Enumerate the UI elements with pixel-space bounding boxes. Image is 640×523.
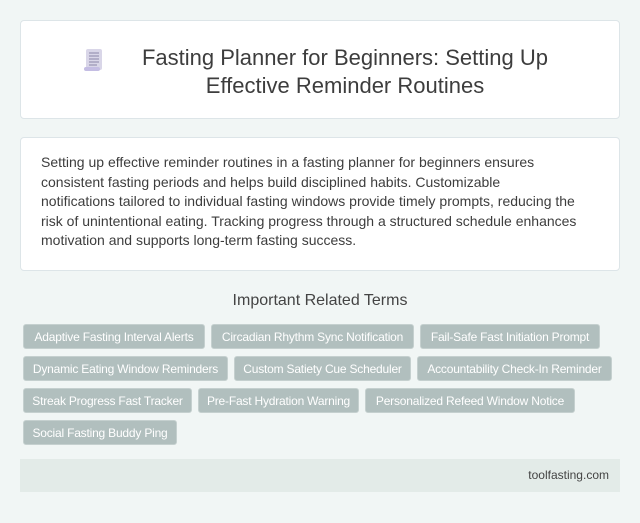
description text: risk of unintentional eating. Tracking progress through a structured schedule enhances <box>41 212 576 228</box>
tags: Custom Satiety Cue Scheduler <box>243 362 402 376</box>
description text: motivation and supports long-term fasting success. <box>41 232 356 248</box>
title: Fasting Planner for Beginners: Setting Up Effective Reminder Routines <box>142 45 548 98</box>
description text: consistent fasting periods and helps build disciplined habits. Customizable <box>41 174 500 190</box>
description text <box>41 154 576 248</box>
tags: Streak Progress Fast Tracker <box>32 394 183 408</box>
icon: scroll <box>84 49 102 71</box>
description text: notifications tailored to individual fasting windows provide timely prompts, reducing the <box>41 193 575 209</box>
tags: Fail-Safe Fast Initiation Prompt <box>431 330 589 344</box>
footer: toolfasting.com <box>528 468 609 482</box>
tags: Pre-Fast Hydration Warning <box>207 394 350 408</box>
tags: Adaptive Fasting Interval Alerts <box>34 330 194 344</box>
related terms heading: Important Related Terms <box>233 292 407 309</box>
tags: Circadian Rhythm Sync Notification <box>222 330 403 344</box>
tags: Social Fasting Buddy Ping <box>32 426 168 440</box>
tags: Personalized Refeed Window Notice <box>376 394 564 408</box>
title panel <box>20 20 620 119</box>
tags: Accountability Check-In Reminder <box>427 362 602 376</box>
tags: Dynamic Eating Window Reminders <box>33 362 218 376</box>
footer <box>20 459 620 492</box>
description panel <box>20 137 620 271</box>
description text: Setting up effective reminder routines in a fasting planner for beginners ensures <box>41 154 534 170</box>
